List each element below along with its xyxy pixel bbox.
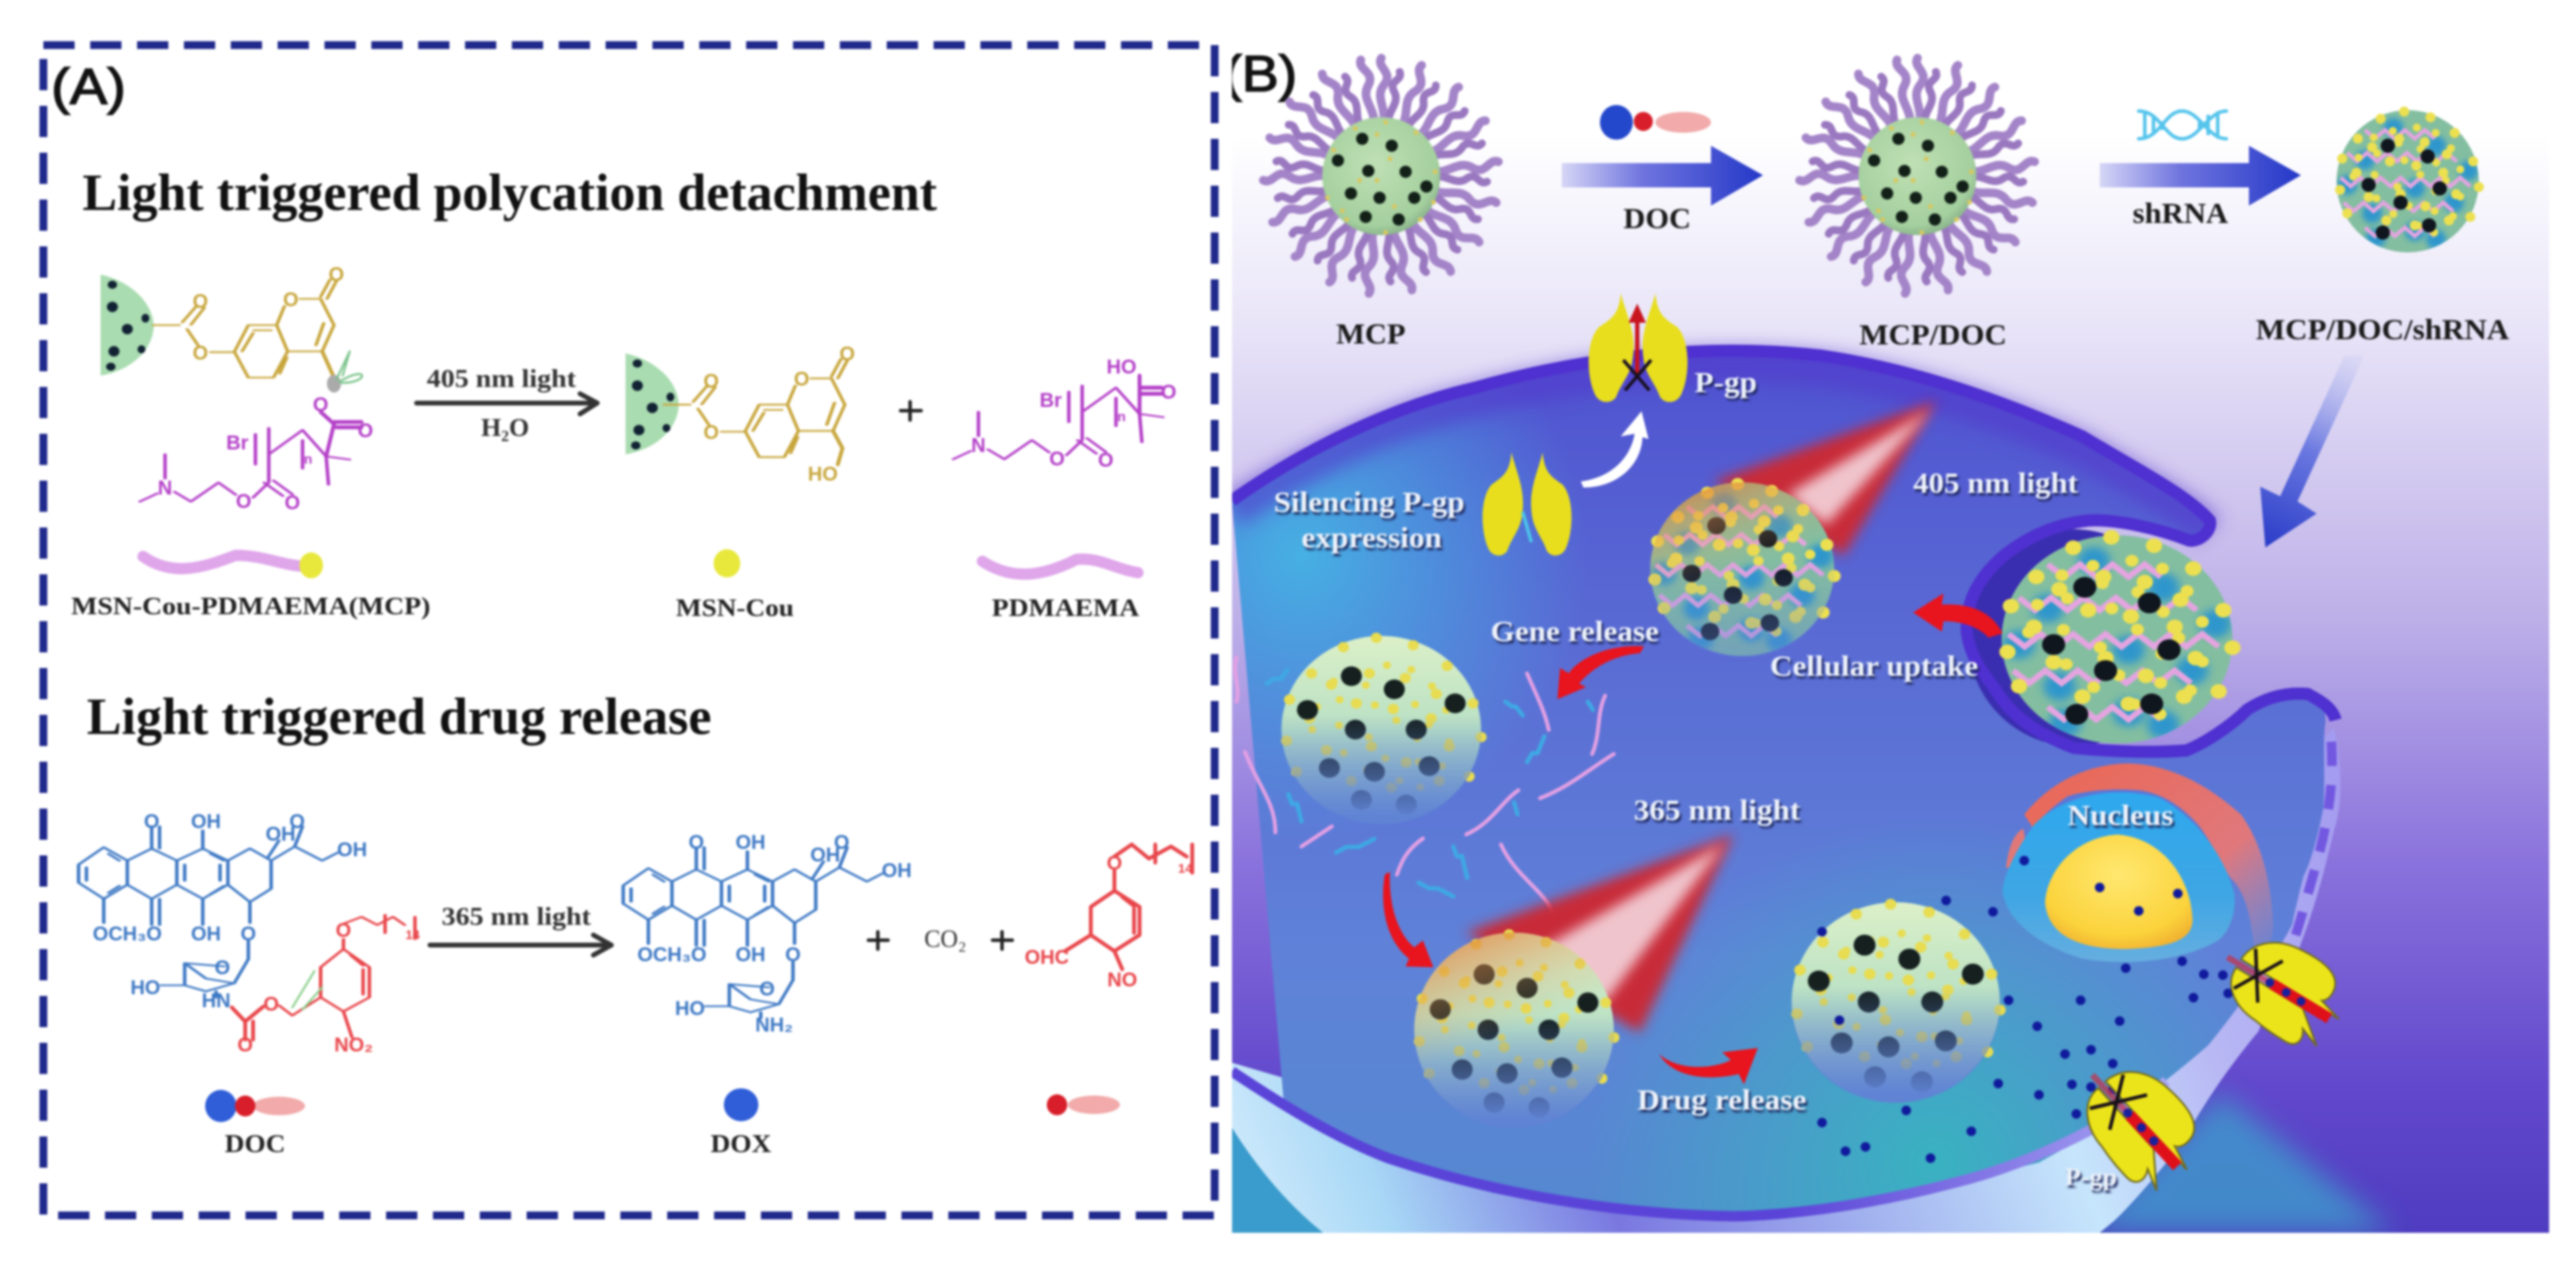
nanoparticle MCP/DOC/shRNA [2337,105,2486,252]
label P-gp: P-gp [1694,367,1757,399]
structure: DOC: O [264,992,279,1015]
reaction 2: drug release [79,809,1193,1122]
bottom-left corner tint [1232,1119,1327,1233]
structure: DOC: NO₂ [334,1033,373,1056]
label Drug release: Drug release [1637,1084,1806,1117]
label DOX: DOX [711,1130,771,1158]
nanoparticle MCP/DOC [1799,58,2035,293]
condition 405 nm light: 405 nm light [427,364,576,393]
arrow: 365 nm reaction [429,935,612,955]
panel label A: (A) [51,59,126,115]
nucleolus [2045,835,2193,949]
P-gp efflux pump lower [2060,1043,2218,1203]
label Nucleus: Nucleus [2068,800,2173,832]
structure: MSN-Cou [626,343,855,485]
heading: Light triggered drug release: Light triggered drug release [87,688,711,745]
label Gene release: Gene release [1491,616,1659,648]
label MCP/DOC/shRNA: MCP/DOC/shRNA [2256,314,2509,346]
arrow to DOC loading [1562,146,1763,206]
structure: DOX: NH₂ [755,1013,793,1036]
structure: DOX [623,831,912,1036]
structure: DOC: HN [201,989,231,1012]
structure: aldehyde by-product: OHC [1025,946,1069,968]
icon: MCP polymer with coumarin [143,553,323,579]
red arrow: drug release [1659,1048,1758,1084]
condition 365 nm light: 365 nm light [442,902,591,931]
plus sign [868,932,888,949]
arrow to shRNA loading [2100,146,2301,206]
nanoparticle after drug release [1791,901,2001,1103]
released polymer and gene fragments [1236,658,1614,913]
label MCP/DOC: MCP/DOC [1859,319,2007,351]
label DOC: DOC [225,1130,285,1158]
structure: DOC: O [238,1033,253,1056]
nanoparticle under 405 nm light [1649,476,1843,657]
panel A: chemical reactions [43,45,1215,1215]
panel B: cell uptake illustration [1223,0,2549,1233]
label Silencing P-gp expression: expression [1301,522,1442,554]
dashed panel border [43,45,1215,1215]
white arrow to membrane [1581,411,1649,488]
label PDMAEMA: PDMAEMA [992,594,1139,622]
structure: DOC: 14 [405,927,421,942]
icon: red-pink by-product [1047,1094,1120,1116]
structure: aldehyde by-product [1025,844,1193,991]
structure: DOC: O [336,919,351,941]
drug molecules [1822,861,2228,1158]
P-gp on membrane [1589,293,1688,402]
icon: DOX blue sphere [724,1088,758,1121]
structure: PDMAEMA: HO [1106,356,1137,378]
nucleus blue dome [2002,792,2235,962]
structure: MSN coumarin polymer [101,263,373,514]
label Cellular uptake: Cellular uptake [1770,651,1978,683]
red arrow: to 365 nm [1383,872,1433,967]
P-gp expression in cell [1483,452,1571,555]
arrow into cell [2260,356,2364,547]
nuclear envelope [2024,763,2273,963]
outer crystal band of the cell [1232,729,2341,1233]
cell membrane lower [1232,1071,2166,1216]
nanoparticle in vesicle [2002,527,2244,743]
cell membrane glow [1232,364,2208,531]
panel background gradient [1230,193,2551,1235]
plus sign [993,932,1013,949]
label B: (B) [1223,46,1297,102]
label MCP: MCP [1336,318,1406,350]
nucleus [2002,763,2273,963]
structure: MSN coumarin polymer: O [313,393,329,416]
405 nm light beam [1714,401,1937,555]
plus sign [901,402,921,420]
label DOC: DOC [1623,203,1691,235]
text CO2: CO₂ [924,927,967,953]
P-gp efflux pump right [2206,919,2360,1059]
icon: DOC [1600,105,1711,140]
label Silencing P-gp expression: Silencing P-gp [1274,487,1465,519]
365 nm light beam [1466,835,1734,1032]
red arrow: gene release [1557,646,1644,699]
structure: aldehyde by-product: 14 [1178,861,1193,876]
heading: Light triggered polycation detachment: Light triggered polycation detachment [82,164,937,221]
structure: DOC [79,809,421,1056]
arrow: 405 nm reaction [416,394,597,414]
nanoparticle after gene release [1281,635,1482,824]
structure: MSN coumarin polymer: O [357,419,373,442]
label Silencing P-gp expression [1274,487,1465,554]
red arrow: uptake to 405 [1913,593,2002,638]
icon: DOC blue-red-pink [205,1090,305,1122]
icon: shRNA helix [2139,111,2226,139]
icon: MSN-Cou dot [713,549,740,578]
vesicle interior [1971,527,2105,745]
structure: aldehyde by-product: O [1106,852,1122,874]
cell body [1232,350,2325,1215]
cell membrane upper and vesicle [1232,350,2336,752]
label shRNA: shRNA [2133,198,2228,230]
structure: PDMAEMA: O [1161,380,1177,403]
label 405 nm light: 405 nm light [1913,468,2079,500]
structure: MSN-Cou: HO [808,462,838,485]
reaction 1: polycation detachment [101,263,1177,579]
label MSN-Cou: MSN-Cou [676,594,794,622]
condition H2O: H₂O [481,414,529,442]
nuclear envelope left fragment [2006,828,2027,869]
label MSN-Cou-PDMAEMA(MCP): MSN-Cou-PDMAEMA(MCP) [71,593,430,620]
icon: PDMAEMA ribbon [982,559,1138,574]
structure: PDMAEMA [954,356,1177,471]
nanoparticle under 365 nm light [1413,932,1615,1128]
cell membrane dabs [2292,742,2332,946]
structure: aldehyde by-product: NO [1107,968,1137,991]
bottom-right teal tint [2082,1093,2395,1233]
nanoparticle MCP [1263,58,1499,293]
label 365 nm light: 365 nm light [1634,795,1801,827]
label lower P-gp: P-gp [2065,1164,2117,1191]
